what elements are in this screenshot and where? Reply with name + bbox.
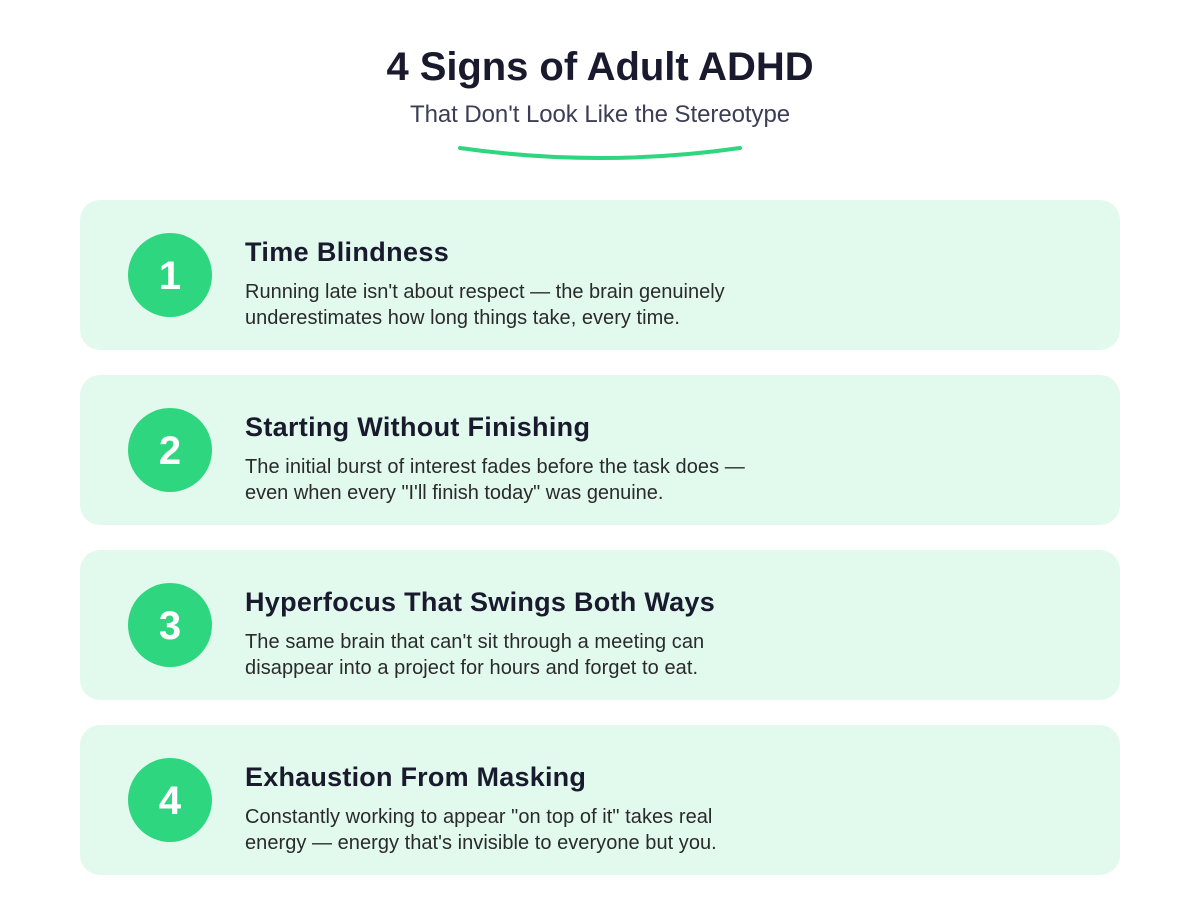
number badge 2: 2 [159,429,181,473]
number badge 1: 1 [159,254,181,298]
description 3: The same brain that can't sit through a meeting can [245,631,704,653]
panel: sign 2 [80,375,1120,525]
panel: sign 1 [80,200,1120,350]
description 4 [245,806,717,854]
description 2: even when every "I'll finish today" was genuine. [245,482,663,504]
number badge 1 [128,233,212,317]
description 2 [245,456,745,504]
description 1: Running late isn't about respect — the brain genuinely [245,281,725,303]
heading: Time Blindness: Time Blindness [245,237,449,267]
number badge 4: 4 [159,779,181,823]
title: 4 Signs of Adult ADHD [386,45,814,89]
description 2: The initial burst of interest fades before the task does — [245,456,745,478]
description 4: Constantly working to appear "on top of it" takes real [245,806,712,828]
number badge 3 [128,583,212,667]
accent underline [458,146,742,160]
heading: Exhaustion From Masking: Exhaustion From Masking [245,762,586,792]
number badge 3: 3 [159,604,181,648]
heading: Starting Without Finishing: Starting Without Finishing [245,412,590,442]
number badge 4 [128,758,212,842]
subtitle: That Don't Look Like the Stereotype [410,101,790,128]
description 1: underestimates how long things take, every time. [245,307,680,329]
panel: sign 3 [80,550,1120,700]
heading: Hyperfocus That Swings Both Ways: Hyperfocus That Swings Both Ways [245,587,715,617]
number badge 2 [128,408,212,492]
description 3: disappear into a project for hours and forget to eat. [245,657,698,679]
description 3 [245,631,704,679]
description 1 [245,281,725,329]
description 4: energy — energy that's invisible to everyone but you. [245,832,717,854]
panel: sign 4 [80,725,1120,875]
